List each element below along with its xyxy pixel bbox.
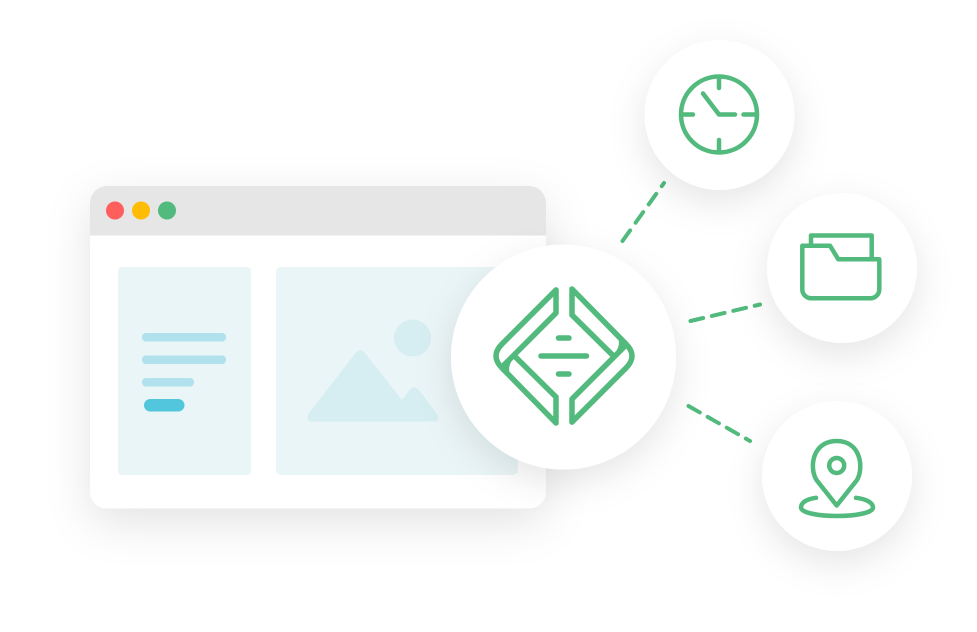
panel: browser window — [90, 186, 546, 508]
location badge — [762, 401, 912, 551]
connector: to folder — [690, 304, 760, 321]
icon: sun — [394, 320, 431, 356]
yellow window dot — [132, 202, 150, 220]
central logo badge — [451, 244, 676, 470]
green window dot — [158, 202, 176, 220]
icon: map pin — [801, 441, 873, 516]
icon: mountains — [307, 350, 438, 422]
red window dot — [106, 202, 124, 220]
folder badge — [767, 193, 917, 343]
connector: to clock — [622, 183, 664, 241]
button — [144, 399, 184, 412]
connector: to location pin — [688, 406, 750, 441]
window body — [90, 186, 546, 508]
image placeholder panel — [276, 267, 518, 475]
icon: folder — [802, 236, 879, 298]
text line 2 — [142, 356, 226, 364]
left content panel — [118, 267, 251, 475]
window title bar — [90, 186, 546, 236]
icon: diamond logo — [496, 289, 632, 423]
text line 3 — [142, 378, 194, 386]
icon: clock — [681, 76, 757, 152]
clock badge — [644, 40, 794, 190]
text line 1 — [142, 333, 226, 342]
